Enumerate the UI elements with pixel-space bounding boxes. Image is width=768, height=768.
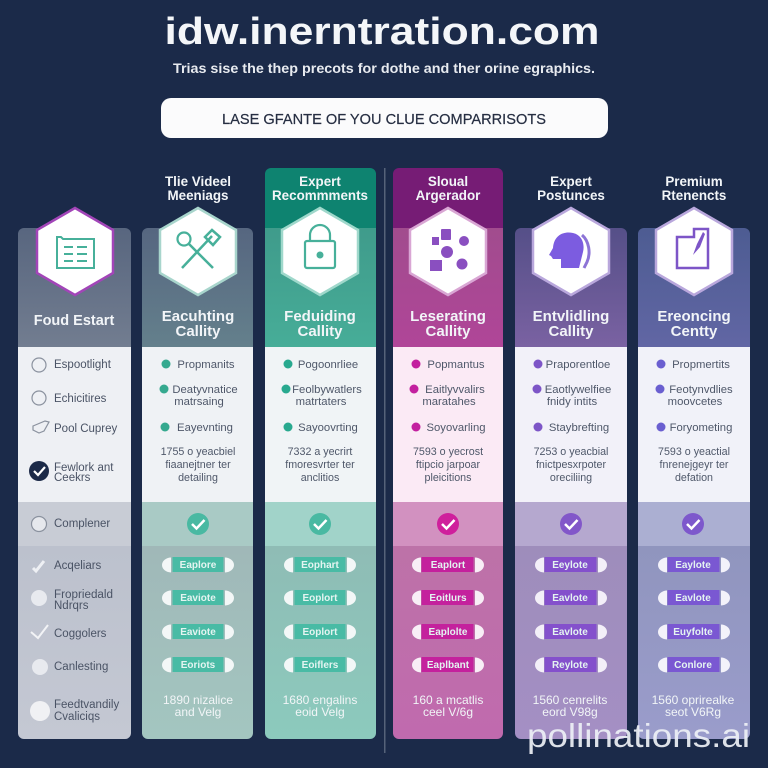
price note — [283, 693, 357, 719]
feature list: Deatyvnatice — [172, 384, 238, 396]
icon: document hexagon — [37, 208, 113, 295]
explore buttons: Eoitlurs — [429, 593, 467, 604]
plan name: Callity — [548, 323, 594, 340]
feature list: defation — [675, 472, 713, 484]
column heading: Sloual — [428, 174, 468, 189]
feature list: fnrenejgeyr ter — [660, 459, 729, 471]
explore buttons: Eoplort — [302, 593, 338, 604]
icon: connected nodes hexagon — [410, 208, 486, 295]
column heading: Tlie Videel — [165, 174, 231, 189]
plan name: Callity — [175, 323, 221, 340]
plan name: Callity — [425, 323, 471, 340]
column heading — [537, 174, 605, 203]
feature list: Echicitires — [54, 393, 107, 405]
watermark: pollinations.ai — [527, 717, 750, 754]
feature list: fnictpesxrpoter — [536, 459, 606, 471]
explore buttons: Eeylote — [552, 560, 588, 571]
price note: eord V98g — [542, 705, 598, 719]
feature list: Feotynvdlies — [669, 384, 733, 396]
explore buttons — [658, 557, 730, 672]
feature list: Sayoovrting — [298, 422, 358, 434]
feature list: maratahes — [422, 396, 476, 408]
explore buttons: Eoiflers — [302, 660, 339, 671]
lower feature list: Fropriedald — [54, 589, 113, 601]
explore buttons: Eavlote — [552, 627, 588, 638]
feature list: Eayevnting — [177, 422, 233, 434]
feature list — [656, 359, 733, 484]
explore buttons: Eaplolte — [429, 627, 468, 638]
price note — [533, 693, 607, 719]
feature list: 7332 a yecrirt — [288, 446, 352, 458]
feature list: Feolbywatlers — [292, 384, 362, 396]
column heading — [416, 174, 481, 203]
column heading: Foud Estart — [34, 313, 114, 329]
plan name — [162, 308, 234, 340]
column heading: Expert — [550, 174, 592, 189]
plan name: Feduiding — [284, 308, 356, 325]
panel: the video meetings — [142, 174, 253, 739]
feature list: Praporentloe — [546, 359, 610, 371]
explore buttons: Eaplbant — [427, 660, 470, 671]
feature list: Propmanits — [177, 359, 235, 371]
feature list: Staybrefting — [549, 422, 609, 434]
feature list: Pogoonrliee — [298, 359, 358, 371]
row label: completer: Complener — [54, 518, 110, 530]
price note: 1680 engalins — [283, 693, 357, 707]
icon: edit square hexagon — [656, 208, 732, 295]
lower feature list: Coggolers — [54, 628, 107, 640]
panel: expert postures — [515, 174, 627, 739]
price note: 1560 oprirealke — [652, 693, 735, 707]
feature list — [29, 358, 118, 484]
column heading — [165, 174, 231, 203]
plan name: Centty — [671, 323, 718, 340]
explore buttons: Eaplort — [431, 560, 466, 571]
lower feature list: Acqeliars — [54, 560, 102, 572]
feature list: Propmertits — [672, 359, 730, 371]
price note: ceel V/6g — [423, 705, 473, 719]
feature list — [410, 359, 486, 484]
feature list: Espootlight — [54, 359, 112, 371]
icon: head profile hexagon — [533, 208, 609, 295]
explore buttons: Euyfolte — [673, 627, 713, 638]
feature list: Soyovarling — [426, 422, 486, 434]
plan name: Ereoncing — [657, 308, 731, 325]
price note — [652, 693, 735, 719]
price note — [413, 693, 483, 719]
explore buttons: Eoplort — [302, 627, 338, 638]
explore buttons: Reylote — [552, 660, 588, 671]
column heading: Premium — [665, 174, 723, 189]
feature list: anclitios — [301, 472, 339, 484]
price note: 1560 cenrelits — [533, 693, 607, 707]
explore buttons: Eaylote — [675, 560, 711, 571]
title: idw.inerntration.com — [164, 11, 600, 53]
subtitle: Trias sise the thep precots for dothe and ther orine egraphics. — [173, 60, 595, 76]
feature list: 7593 o yeactial — [658, 446, 730, 458]
lower feature list: Ndrqrs — [54, 600, 89, 612]
feature list: Eaotlywelfiee — [545, 384, 611, 396]
column heading: Recommments — [272, 188, 368, 203]
plan name: Leserating — [410, 308, 486, 325]
plan name — [533, 308, 609, 340]
plan name: Eacuhting — [162, 308, 234, 325]
icon: padlock hexagon — [282, 208, 358, 295]
price note: eoid Velg — [295, 705, 345, 719]
feature list: pleicitions — [425, 472, 471, 484]
column heading: Argerador — [416, 188, 481, 203]
explore buttons: Eaviote — [180, 627, 216, 638]
feature list: oreciliing — [550, 472, 592, 484]
column heading — [272, 174, 368, 203]
explore buttons — [535, 557, 607, 672]
feature list: fnidy intits — [547, 396, 597, 408]
panel: premium artencts — [638, 174, 750, 739]
explore buttons — [284, 557, 356, 672]
feature list — [282, 359, 362, 484]
check mark — [682, 513, 704, 535]
check mark — [309, 513, 331, 535]
lower feature list — [30, 560, 119, 723]
feature list: fiaanejtner ter — [165, 459, 231, 471]
feature list: fmoresvrter ter — [285, 459, 355, 471]
explore buttons: Eophart — [301, 560, 340, 571]
explore buttons: Eavlote — [552, 593, 588, 604]
feature list: matrtaters — [296, 396, 347, 408]
check mark — [560, 513, 582, 535]
explore buttons: Eaviote — [180, 593, 216, 604]
center divider — [384, 168, 386, 753]
price note: 160 a mcatlis — [413, 693, 483, 707]
explore buttons: Eavlote — [675, 593, 711, 604]
feature list: detailing — [178, 472, 218, 484]
price note: and Velg — [175, 705, 221, 719]
column heading: Rtenencts — [662, 188, 726, 203]
plan name: Entvlidling — [533, 308, 609, 325]
lower feature list: Cvaliciqs — [54, 711, 100, 723]
column heading: Meeniags — [167, 188, 229, 203]
feature list: Eaitlyvvalirs — [425, 384, 485, 396]
feature list: Popmantus — [427, 359, 485, 371]
feature list — [532, 359, 611, 484]
column heading: Postunces — [537, 188, 605, 203]
panel: expert recommendations (highlighted) — [265, 168, 376, 739]
explore buttons: Conlore — [674, 660, 712, 671]
feature list: 7253 o yeacbial — [534, 446, 608, 458]
price note: seot V6Rg — [665, 705, 721, 719]
plan name: Callity — [297, 323, 343, 340]
comparison banner: LASE GFANTE OF YOU CLUE COMPARRISOTS — [222, 112, 546, 128]
explore buttons — [162, 557, 234, 672]
feature list: Ceekrs — [54, 472, 91, 484]
plan name — [410, 308, 486, 340]
feature list — [160, 359, 238, 484]
plan name — [284, 308, 356, 340]
column heading — [662, 174, 726, 203]
feature list: Fewlork ant — [54, 462, 114, 474]
feature list: Foryometing — [670, 422, 732, 434]
price note — [163, 693, 233, 719]
check mark — [437, 513, 459, 535]
icon: tools hexagon — [160, 208, 236, 295]
explore buttons: Eoriots — [181, 660, 216, 671]
feature list: Pool Cuprey — [54, 423, 118, 435]
panel: feature labels column — [18, 208, 131, 739]
row label: completer — [32, 516, 110, 532]
price note: 1890 nizalice — [163, 693, 233, 707]
lower feature list: Feedtvandily — [54, 699, 119, 711]
explore buttons — [412, 557, 484, 672]
plan name — [657, 308, 731, 340]
panel: social aggregator (highlighted) — [393, 168, 503, 739]
column heading: Expert — [299, 174, 341, 189]
lower feature list: Canlesting — [54, 661, 108, 673]
explore buttons: Eaplore — [180, 560, 217, 571]
feature list: ftipcio jarpoar — [416, 459, 481, 471]
feature list: moovcetes — [668, 396, 723, 408]
feature list: 1755 o yeacbiel — [161, 446, 235, 458]
comparison banner — [161, 98, 608, 138]
check mark — [187, 513, 209, 535]
feature list: 7593 o yecrost — [413, 446, 483, 458]
feature list: matrsaing — [174, 396, 224, 408]
